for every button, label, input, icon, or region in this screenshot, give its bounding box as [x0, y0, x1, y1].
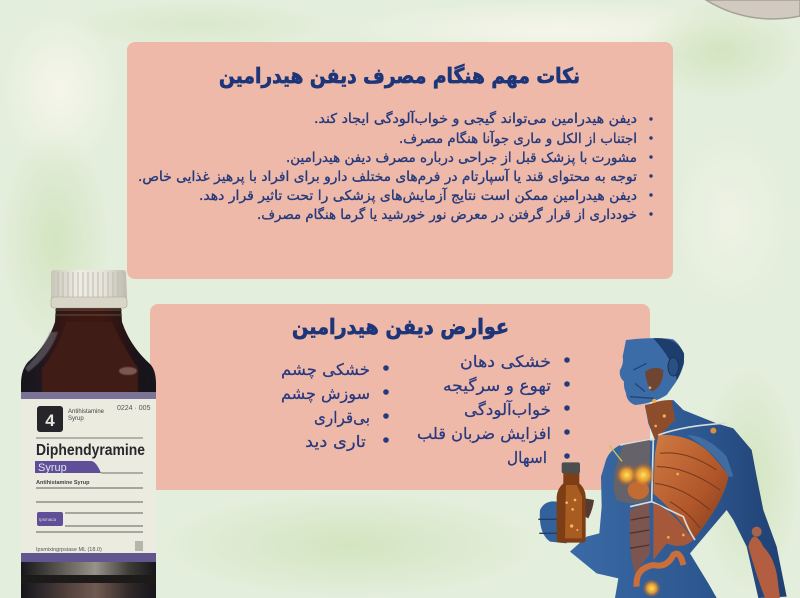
- highlights: [649, 386, 685, 539]
- text block: usage notes list: [138, 110, 653, 223]
- list: side effects right column: افزایش ضربان قلب: [417, 424, 551, 444]
- intestines: [637, 554, 683, 587]
- list: side effects left column: بی‌قراری: [314, 408, 370, 428]
- illustration: syrup bottle: [21, 270, 156, 598]
- bottle label: Antihistamine: [68, 409, 105, 415]
- text block: usage notes list: دیفن هیدرامین ممکن است نتایج آزمایش‌های پزشکی را تحت تاثیر قرار دهد.: [199, 187, 637, 204]
- bottle label: Diphendyramine: [36, 442, 145, 459]
- figure body: [570, 400, 787, 598]
- text block: usage notes list: مشورت با پزشک قبل از جراحی درباره مصرف دیفن هیدرامین.: [286, 150, 637, 166]
- list: side effects left column: [281, 360, 389, 452]
- list: side effects right column: خشکی دهان: [460, 352, 551, 371]
- bottle label: 4: [45, 411, 55, 430]
- bottle base: [21, 562, 156, 598]
- list: side effects right column: تهوع و سرگیجه: [443, 376, 551, 396]
- list: side effects left column: خشکی چشم: [281, 360, 370, 379]
- hand: [540, 501, 567, 543]
- small bottle: [557, 462, 586, 543]
- glowing heart area: [614, 440, 650, 503]
- text block: usage notes list: دیفن هیدرامین می‌تواند گیجی و خواب‌آلودگی ایجاد کند.: [314, 110, 637, 127]
- panel: side effects: [150, 304, 650, 490]
- shoulder band: [687, 435, 733, 477]
- abdominal muscles: [630, 503, 650, 573]
- heading: side effects: عوارض دیفن هیدرامین: [292, 315, 509, 339]
- list: side effects right column: اسهال: [507, 448, 547, 468]
- list: side effects right column: خواب‌آلودگی: [464, 400, 551, 420]
- bottle label: Syrup: [68, 416, 84, 422]
- bottle label: Ipsmixingrpsiase ML (18.0): [36, 547, 102, 553]
- chest muscle: [653, 435, 728, 540]
- bottle label: Ipsmaca: [39, 517, 57, 522]
- bottle label: 0224 · 005: [117, 405, 151, 412]
- neck muscles: [645, 400, 675, 440]
- text block: usage notes list: اجتناب از الکل و ماری جوآنا هنگام مصرف.: [399, 130, 637, 147]
- heading: usage notes: نکات مهم هنگام مصرف دیفن هیدرامین: [219, 63, 580, 88]
- text block: usage notes list: توجه به محتوای قند یا آسپارتام در فرم‌های مختلف دارو برای افراد با پرهیز غذایی خاص.: [138, 168, 637, 185]
- bottle label: [21, 392, 156, 562]
- list: side effects left column: تاری دید: [305, 432, 366, 452]
- forearm muscles: [748, 537, 780, 598]
- text block: usage notes list: خودداری از قرار گرفتن در معرض نور خورشید یا گرما هنگام مصرف.: [257, 206, 637, 223]
- figure head: [620, 338, 684, 405]
- list: side effects left column: سوزش چشم: [281, 384, 370, 404]
- bottle label: Antihistamine Syrup: [36, 480, 90, 486]
- illustration: anatomical figure: [538, 338, 787, 598]
- list: side effects right column: [417, 352, 570, 468]
- panel: usage notes: [127, 42, 673, 279]
- decorative circle top right: [706, 0, 800, 19]
- bottle label: Syrup: [38, 462, 67, 474]
- bottle cap: [51, 270, 127, 308]
